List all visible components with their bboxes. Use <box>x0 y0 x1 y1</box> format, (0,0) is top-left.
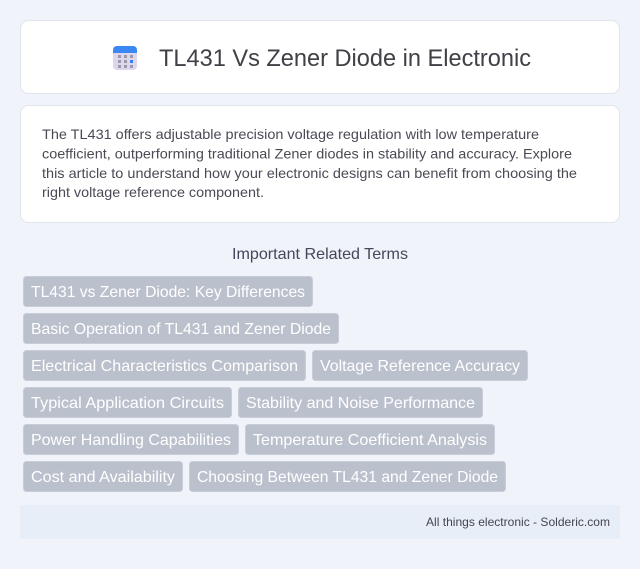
tag: Typical Application Circuits <box>31 395 224 412</box>
tag <box>24 314 338 344</box>
tag <box>190 462 506 492</box>
intro text: The TL431 offers adjustable precision voltage regulation with low temperature <box>42 126 539 142</box>
tag <box>24 388 232 418</box>
footer <box>20 505 620 539</box>
tag: TL431 vs Zener Diode: Key Differences <box>31 284 305 301</box>
tag: Voltage Reference Accuracy <box>320 358 520 375</box>
intro text: right voltage reference component. <box>42 184 264 200</box>
tag: Cost and Availability <box>31 469 175 486</box>
tag <box>24 276 312 306</box>
header panel <box>20 20 620 94</box>
intro text: coefficient, outperforming traditional Zener diodes in stability and accuracy. Explore <box>42 146 572 162</box>
tag <box>24 350 306 380</box>
tag: Temperature Coefficient Analysis <box>253 432 487 449</box>
intro text <box>42 126 577 200</box>
tag <box>238 388 482 418</box>
tag <box>24 424 238 454</box>
related term tags <box>24 276 528 492</box>
heading: related terms: Important Related Terms <box>232 246 408 263</box>
tag <box>24 462 182 492</box>
intro text: this article to understand how your electronic designs can benefit from choosing the <box>42 165 577 181</box>
title: TL431 Vs Zener Diode in Electronic <box>159 45 531 72</box>
tag: Electrical Characteristics Comparison <box>31 358 298 375</box>
tag: Choosing Between TL431 and Zener Diode <box>197 469 498 486</box>
tag: Stability and Noise Performance <box>246 395 475 412</box>
intro panel <box>20 106 620 222</box>
tag <box>312 350 528 380</box>
tag: Basic Operation of TL431 and Zener Diode <box>31 321 331 338</box>
tag: Power Handling Capabilities <box>31 432 231 449</box>
footer: All things electronic - Solderic.com <box>426 515 610 529</box>
icon: calendar <box>113 46 137 70</box>
tag <box>246 424 494 454</box>
